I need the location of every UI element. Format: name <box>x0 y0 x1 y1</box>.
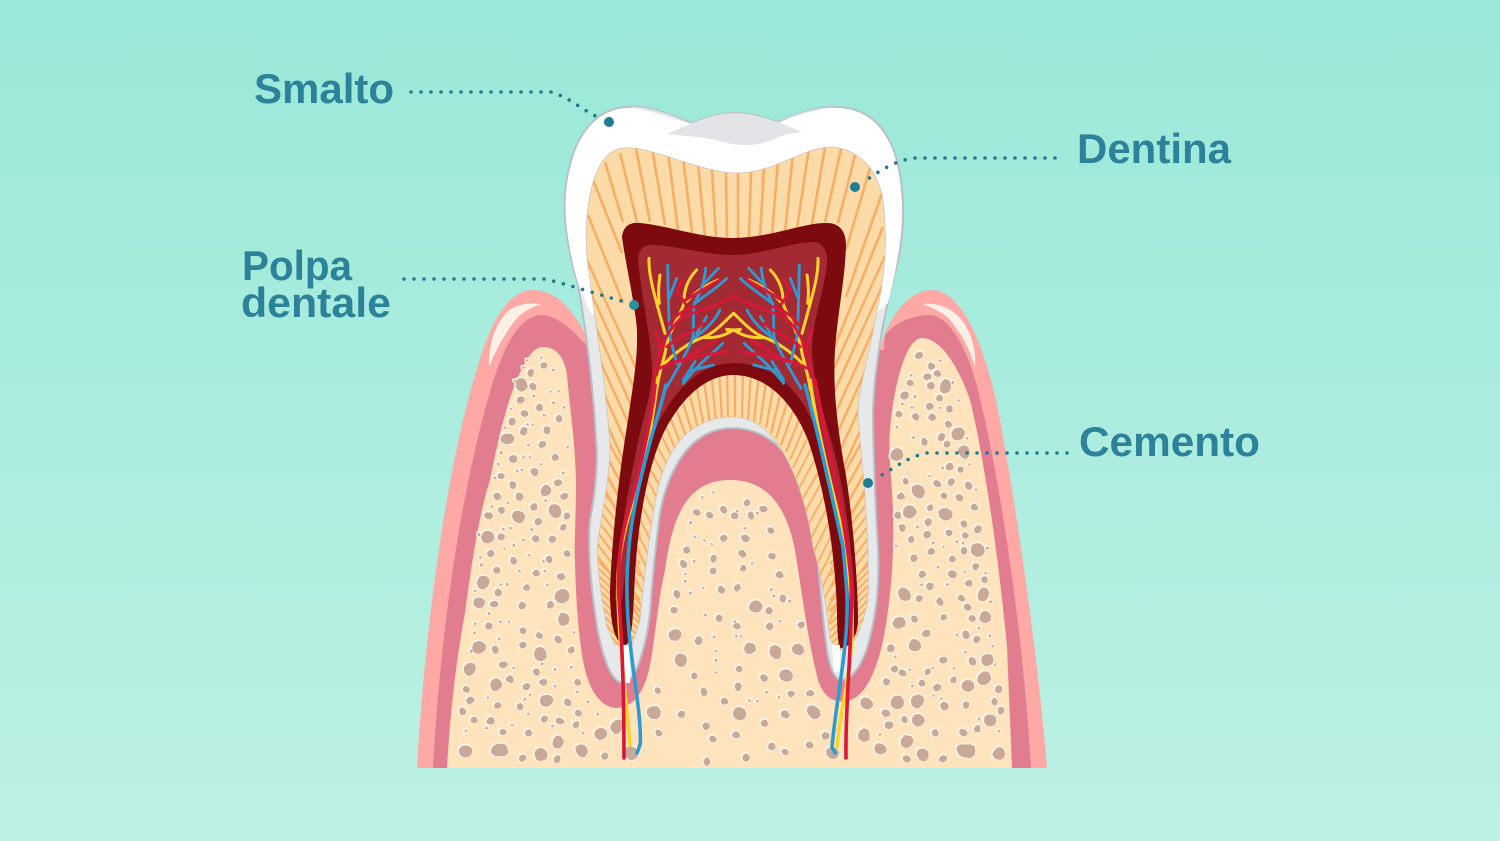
blue vein right <box>805 385 847 753</box>
callout: Smalto <box>254 65 614 127</box>
label: Polpa dentale: Polpa <box>242 242 353 289</box>
red artery right <box>815 380 851 758</box>
label: Dentina: Dentina <box>1077 125 1232 172</box>
callout: Dentina <box>850 125 1232 192</box>
bone pores right <box>733 357 1001 759</box>
callout: Polpa dentale <box>241 242 639 326</box>
leader: Cemento <box>878 453 1067 477</box>
label: Smalto: Smalto <box>254 65 394 112</box>
gum highlight right <box>923 304 975 367</box>
enamel top shading <box>630 107 835 124</box>
gum inner layer <box>433 315 1031 768</box>
gum centre fill <box>590 350 890 720</box>
gum highlight left <box>489 304 541 367</box>
marker: Smalto <box>604 117 614 127</box>
yellow nerve right <box>810 380 852 747</box>
bone pores left <box>463 357 725 762</box>
root nerves <box>618 378 852 758</box>
dentin <box>586 147 885 650</box>
dentin tubules mirrored <box>735 256 885 666</box>
pulp inner <box>615 242 855 610</box>
red artery left <box>618 385 655 758</box>
gum outer layer <box>417 290 1047 768</box>
blue vein left <box>627 385 666 753</box>
root canal white tips <box>622 645 840 683</box>
jaw bone <box>447 338 1012 768</box>
leader: Smalto <box>411 92 600 118</box>
nerves and vessels crown right <box>728 258 818 390</box>
label: Polpa dentale: dentale <box>241 279 391 326</box>
enamel shadow <box>667 113 802 145</box>
label: Cemento: Cemento <box>1079 418 1260 465</box>
nerves and vessels crown left <box>649 258 739 390</box>
bone pores <box>463 357 1001 762</box>
dentin tubules <box>585 147 885 666</box>
pulp outer <box>610 223 858 648</box>
enamel <box>566 108 902 318</box>
marker: Cemento <box>863 478 873 488</box>
marker: Polpa dentale <box>629 300 639 310</box>
yellow nerve left <box>618 378 658 745</box>
leader: Dentina <box>865 158 1055 181</box>
leader: Polpa dentale <box>404 279 625 302</box>
callout: Cemento <box>863 418 1260 488</box>
cementum and root body <box>565 107 903 683</box>
panel: tooth <box>565 107 903 758</box>
marker: Dentina <box>850 182 860 192</box>
panel: gum and bone <box>417 290 1047 768</box>
